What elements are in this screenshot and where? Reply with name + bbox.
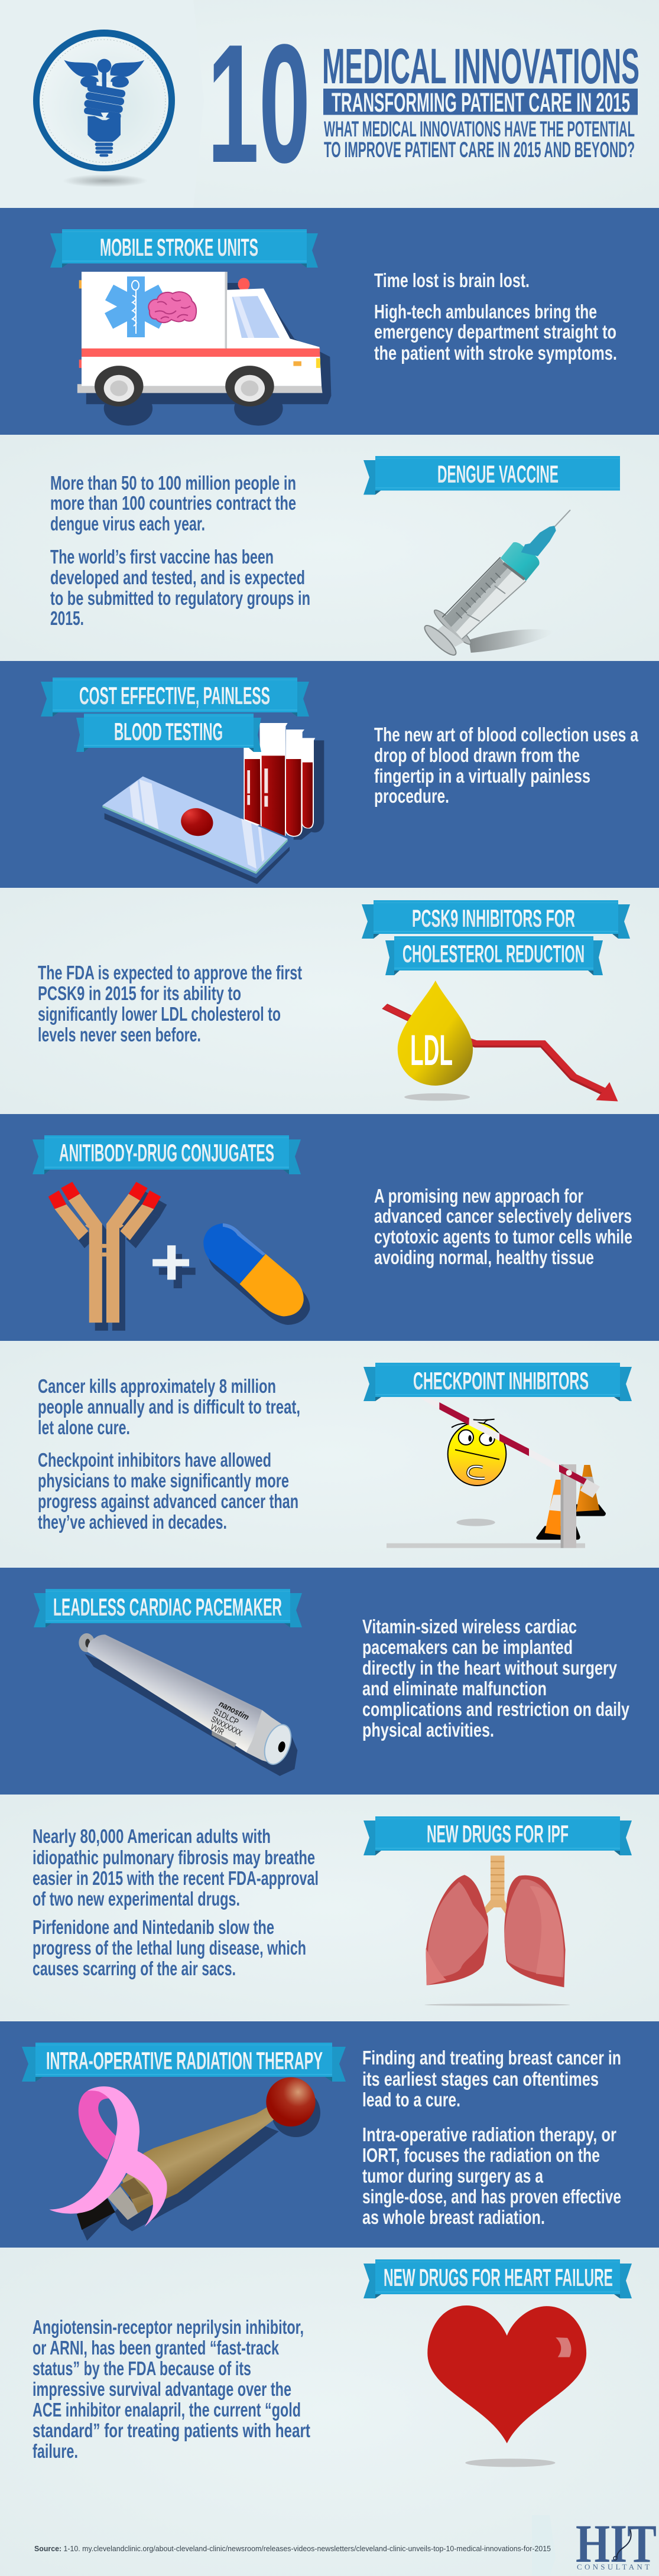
text block: idiopathic pulmonary fibrosis may breathe (33, 1846, 315, 1868)
text block: causes scarring of the air sacs. (33, 1958, 236, 1979)
text block: as whole breast radiation. (362, 2206, 545, 2228)
text block (33, 2316, 310, 2462)
text block (374, 269, 617, 364)
text block: physicians to make significantly more (38, 1470, 289, 1491)
text block: 2015. (50, 607, 84, 629)
label on device (209, 1699, 251, 1738)
text block: and eliminate malfunction (362, 1678, 547, 1699)
text block: The FDA is expected to approve the first (38, 962, 302, 983)
text block (50, 472, 310, 629)
logo: caduceus bulb badge (33, 30, 175, 187)
text block: progress of the lethal lung disease, which (33, 1937, 306, 1959)
text block (33, 1825, 319, 1979)
text block: Nearly 80,000 American adults with (33, 1825, 271, 1847)
banner: blood testing: BLOOD TESTING (114, 718, 223, 745)
text block: A promising new approach for (374, 1185, 583, 1207)
text block (362, 2047, 621, 2228)
banner: mobile stroke units (50, 229, 318, 268)
banner: anitibody-drug conjugates (33, 1135, 301, 1174)
question text (324, 117, 635, 162)
logo: HIT consultant: CONSULTANT (577, 2562, 650, 2571)
panel: dengue vaccine (0, 435, 659, 661)
banner: new drugs for ipf (363, 1816, 632, 1855)
label on device: VVIR (209, 1722, 226, 1737)
text block: developed and tested, and is expected (50, 566, 305, 588)
illustration: lungs (424, 1855, 570, 2006)
text block: they’ve achieved in decades. (38, 1511, 227, 1533)
text block: impressive survival advantage over the (33, 2378, 291, 2400)
source line: Source: 1-10. my.clevelandclinic.org/about-cleveland-clinic/newsroom/releases-videos-newsletters/cleveland-clinic-unveils-top-10-medical-innovations-for-2015 (34, 2544, 551, 2553)
text block: easier in 2015 with the recent FDA-approval (33, 1867, 319, 1889)
banner: blood testing (76, 714, 261, 752)
text block: or ARNI, has been granted “fast-track (33, 2337, 279, 2359)
banner: cholesterol reduction (385, 936, 603, 975)
banner: mobile stroke units: MOBILE STROKE UNITS (100, 233, 258, 261)
text block: Vitamin-sized wireless cardiac (362, 1616, 577, 1637)
text block (362, 1616, 629, 1741)
label on device: S1DLCP (212, 1706, 241, 1727)
illustration: ambulance (77, 272, 331, 426)
text block: more than 100 countries contract the (50, 492, 296, 514)
text block: levels never seen before. (38, 1024, 201, 1046)
banner: leadless cardiac pacemaker: LEADLESS CARDIAC PACEMAKER (53, 1593, 282, 1621)
text block: More than 50 to 100 million people in (50, 472, 296, 494)
icon: star of life (105, 276, 167, 337)
text block: of two new experimental drugs. (33, 1888, 240, 1910)
illustration: LDL drop and falling arrow (385, 981, 618, 1101)
banner: anitibody-drug conjugates: ANITIBODY-DRUG CONJUGATES (59, 1139, 274, 1167)
text block: The world’s first vaccine has been (50, 546, 274, 568)
illustration: ribbon and radiation device (49, 2077, 320, 2240)
text block: progress against advanced cancer than (38, 1490, 298, 1512)
banner: intra-operative radiation therapy (22, 2043, 346, 2082)
banner: checkpoint inhibitors (363, 1363, 632, 1401)
text block: physical activities. (362, 1719, 494, 1741)
text block: status” by the FDA because of its (33, 2357, 251, 2379)
banner: intra-operative radiation therapy: INTRA-OPERATIVE RADIATION THERAPY (46, 2047, 323, 2075)
label on device: nanostim (217, 1699, 251, 1722)
panel: header (0, 0, 659, 208)
panel: new drugs for IPF (0, 1795, 659, 2021)
illustration: LDL drop and falling arrow: LDL (410, 1027, 453, 1074)
text block: dengue virus each year. (50, 513, 205, 535)
text block: PCSK9 in 2015 for its ability to (38, 982, 241, 1004)
banner: dengue vaccine (363, 456, 620, 495)
banner: cost effective, painless: COST EFFECTIVE, PAINLESS (79, 682, 270, 709)
big number 10: 10 (207, 9, 310, 198)
text block: standard” for treating patients with heart (33, 2419, 310, 2441)
text block: people annually and is difficult to treat, (38, 1396, 300, 1418)
text block: Pirfenidone and Nintedanib slow the (33, 1916, 274, 1938)
text block (38, 962, 302, 1046)
illustration: heart (427, 2305, 586, 2467)
panel: mobile stroke units (0, 208, 659, 435)
panel: new drugs for heart failure (0, 2248, 659, 2576)
illustration: test tubes and slide (102, 723, 324, 884)
banner: new drugs for heart failure (363, 2259, 632, 2298)
text block: Time lost is brain lost. (374, 269, 530, 291)
label on device: SNXXXXXX (210, 1714, 244, 1738)
illustration: syringe (421, 510, 570, 659)
text block (374, 724, 638, 807)
illustration: antibody plus pill (48, 1182, 310, 1331)
panel: antibody-drug conjugates (0, 1114, 659, 1341)
text block: procedure. (374, 785, 449, 807)
text block (38, 1375, 300, 1533)
text block: pacemakers can be implanted (362, 1636, 573, 1658)
text block: tumor during surgery as a (362, 2165, 543, 2187)
text block: drop of blood drawn from the (374, 744, 580, 766)
text block: to be submitted to regulatory groups in (50, 587, 310, 609)
text block: significantly lower LDL cholesterol to (38, 1003, 281, 1025)
text block: Checkpoint inhibitors have allowed (38, 1449, 271, 1471)
text block: avoiding normal, healthy tissue (374, 1246, 594, 1268)
text block: fingertip in a virtually painless (374, 765, 590, 787)
panel: leadless cardiac pacemaker (0, 1568, 659, 1795)
banner: pcsk9 inhibitors for (362, 900, 630, 939)
text block: failure. (33, 2440, 78, 2462)
panel: intra-operative radiation therapy (0, 2021, 659, 2248)
panel: blood testing (0, 661, 659, 888)
text block: lead to a cure. (362, 2089, 460, 2111)
text block (374, 1185, 632, 1268)
text block: Angiotensin-receptor neprilysin inhibitor, (33, 2316, 304, 2338)
text block: let alone cure. (38, 1416, 130, 1438)
banner: leadless cardiac pacemaker (34, 1589, 302, 1627)
banner: cost effective, painless (41, 678, 309, 717)
banner: dengue vaccine: DENGUE VACCINE (437, 460, 559, 488)
panel: checkpoint inhibitors (0, 1341, 659, 1568)
illustration: barrier, face and cones (387, 1398, 606, 1548)
text block: Cancer kills approximately 8 million (38, 1375, 276, 1397)
text block: ACE inhibitor enalapril, the current “gold (33, 2399, 301, 2421)
illustration: nanostim pacemaker (79, 1633, 297, 1776)
panel: pcsk9 inhibitors (0, 888, 659, 1114)
icon: brain (148, 292, 196, 323)
